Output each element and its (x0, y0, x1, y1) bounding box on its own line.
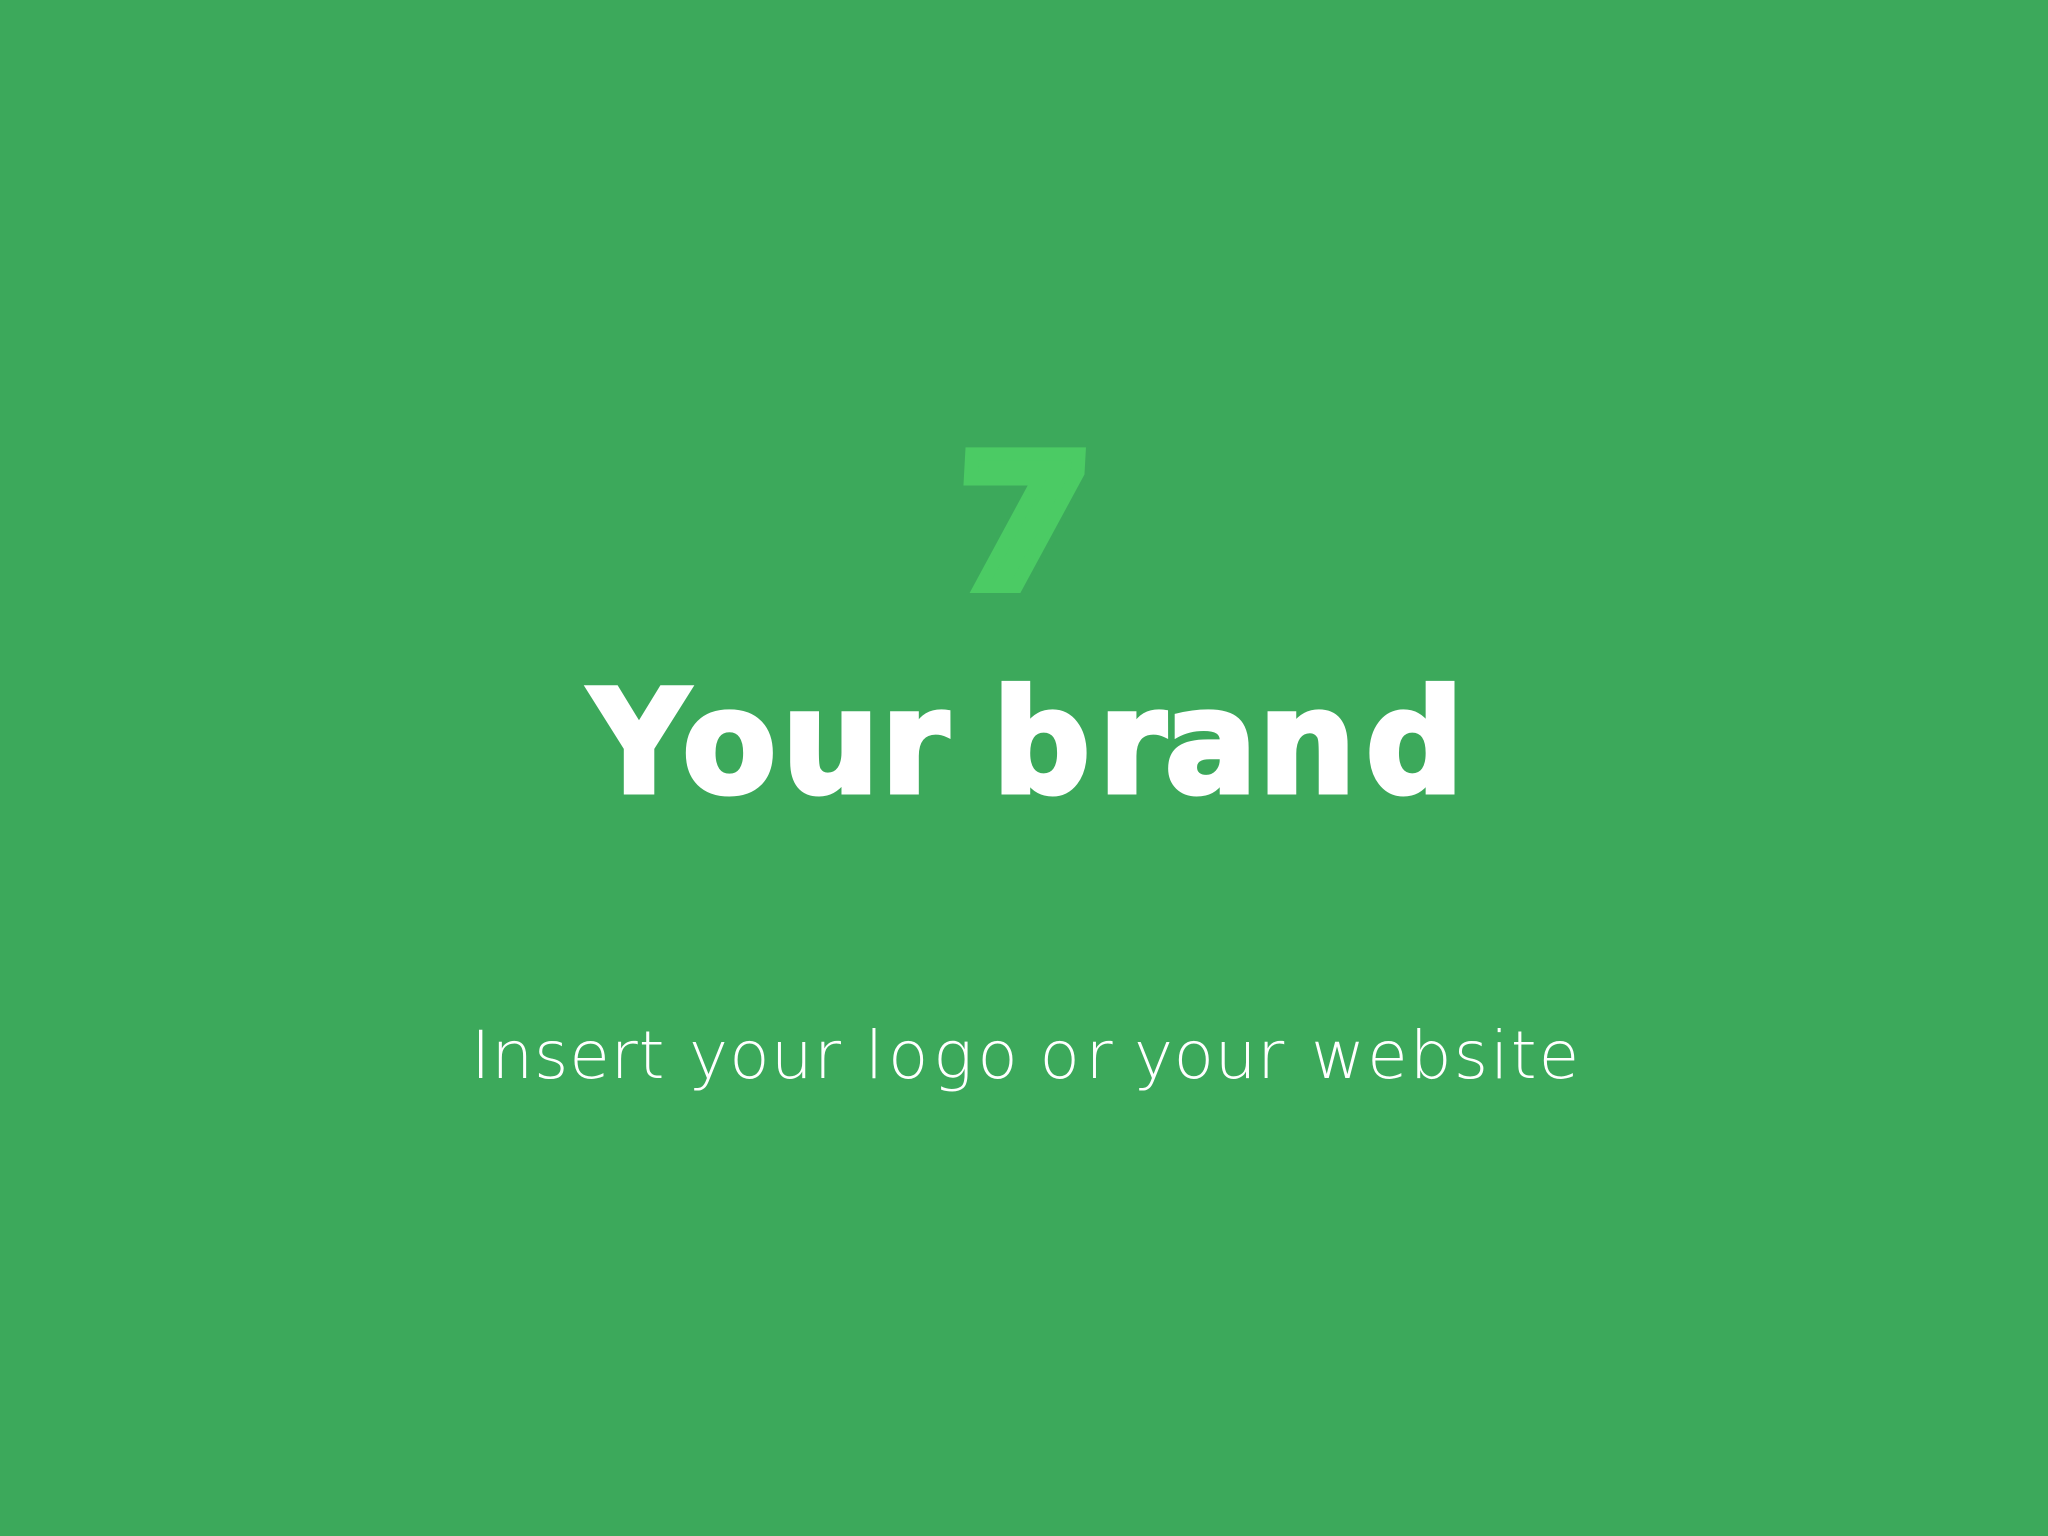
subtitle: logo or website prompt (471, 1017, 1581, 1094)
subtitle: logo or website prompt: Insert (471, 1017, 687, 1094)
subtitle: logo or website prompt: your (1134, 1017, 1306, 1094)
subtitle: logo or website prompt: logo (865, 1017, 1048, 1094)
step number 7: 7 (949, 418, 1096, 629)
subtitle: logo or website prompt: your (689, 1017, 864, 1094)
subtitle: logo or website prompt: website (1311, 1017, 1581, 1094)
heading: Your brand: Your brand (588, 660, 1464, 827)
subtitle: logo or website prompt: or (1040, 1017, 1145, 1094)
